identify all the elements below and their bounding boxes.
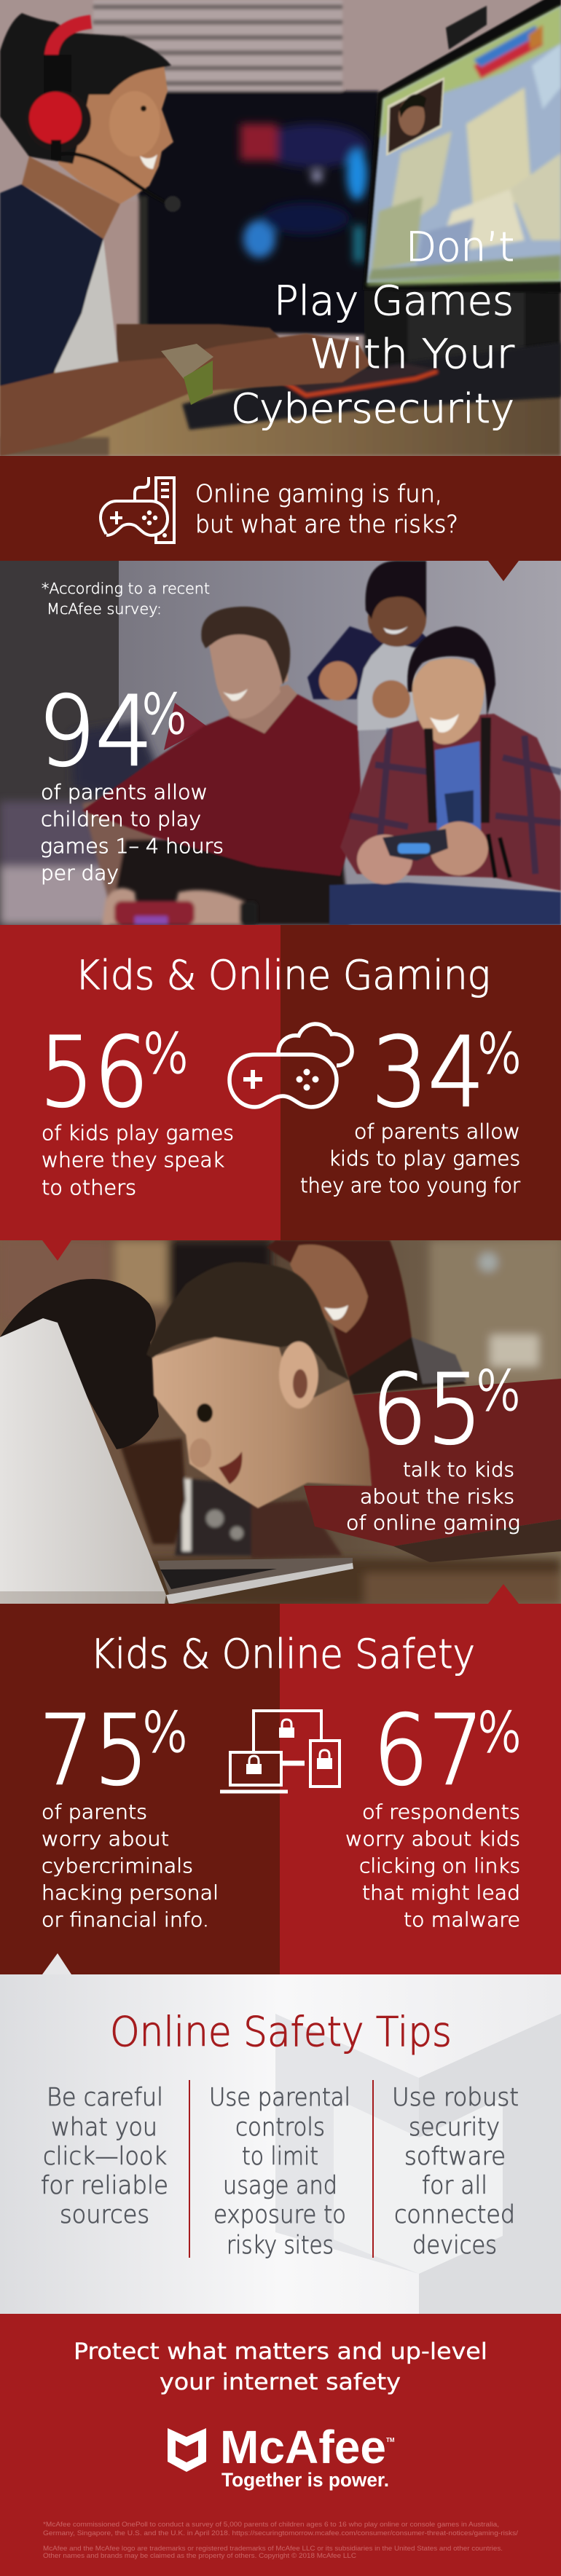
icon: game controller and tower <box>101 477 174 543</box>
stat: 94%: 94 <box>38 676 153 788</box>
fine print: Germany, Singapore, the U.S. and the U.K. in April 2018. https://securingtomorrow.mcafee.com/consumer/consumer-threat-notices/gaming-risks/ <box>43 2529 518 2537</box>
fine print <box>43 2521 518 2560</box>
teen boy in red sweater <box>82 607 361 925</box>
tip: security software: for all <box>422 2171 487 2200</box>
stat: 67%: that might lead <box>362 1882 520 1905</box>
tip: be careful: click—look <box>43 2142 167 2171</box>
survey note: *According to a recent <box>42 580 210 597</box>
stat: 34%: 34 <box>372 1017 484 1129</box>
monitor <box>363 0 561 293</box>
stat: 56%: to others <box>42 1175 136 1200</box>
logo: McAfee: Together is power. <box>221 2469 389 2491</box>
stat: 56% <box>39 1017 234 1200</box>
stat: 34%: kids to play games <box>329 1146 520 1170</box>
logo: McAfee: TM <box>386 2437 395 2443</box>
logo: McAfee: McAfee <box>220 2421 386 2473</box>
heading: Kids & Online Safety <box>90 1631 475 1677</box>
tip: security software: devices <box>412 2231 497 2260</box>
panel: hero photo of boy gaming <box>0 0 561 456</box>
tip: security software <box>392 2083 519 2260</box>
stat: 65% <box>346 1354 521 1535</box>
arrow: red pointer from safety panel <box>488 1584 519 1604</box>
laptop <box>0 1318 353 1604</box>
webcam inset <box>386 77 444 156</box>
stat: 34%: they are too young for <box>300 1173 520 1197</box>
stat: 67%: of respondents <box>362 1801 520 1824</box>
stat: 65%: talk to kids <box>403 1459 514 1481</box>
icon: controller with cloud <box>230 1024 352 1107</box>
title: Play Games <box>274 277 514 324</box>
panel: kids and online gaming <box>0 925 561 1240</box>
heading: Online Safety Tips <box>110 2009 452 2056</box>
stat: 75%: 75 <box>39 1695 149 1807</box>
arrow: white pointer <box>42 1953 71 1974</box>
icon: locked devices <box>220 1711 340 1792</box>
title <box>231 224 514 432</box>
other child's hair <box>0 1279 159 1449</box>
heading: Kids & Online Gaming <box>75 952 490 999</box>
call to action: your internet safety <box>160 2369 401 2395</box>
stat: 56%: of kids play games <box>42 1121 234 1145</box>
call to action <box>74 2339 487 2395</box>
smartwatch <box>161 344 213 405</box>
stat: 94%: % <box>141 682 187 747</box>
arrow: red pointer to photo <box>42 1240 71 1261</box>
stat: 65%: about the risks <box>360 1486 514 1508</box>
title: With Your <box>310 331 514 377</box>
tip: be careful: Be careful <box>47 2083 163 2112</box>
survey note <box>42 580 210 618</box>
tip: security software: security <box>409 2113 500 2142</box>
tip: be careful: what you <box>51 2113 157 2142</box>
stat: 56%: % <box>143 1021 189 1086</box>
tip: security software: software <box>404 2142 506 2171</box>
title: Don’t <box>406 224 514 270</box>
title: Cybersecurity <box>231 385 514 432</box>
stat: 65%: 65 <box>372 1354 482 1466</box>
banner text <box>195 479 458 538</box>
logo: McAfee <box>168 2421 395 2491</box>
panel: photo of child at laptop <box>0 1240 561 1604</box>
tip: parental controls <box>209 2083 350 2260</box>
tip: security software: Use robust <box>392 2083 519 2112</box>
stat: 94%: games 1– 4 hours <box>40 834 224 858</box>
tip: parental controls: controls <box>235 2113 325 2142</box>
stat: 67% <box>345 1695 522 1931</box>
stat: 56%: 56 <box>39 1017 149 1129</box>
mother <box>267 1240 466 1395</box>
stat: 67%: to malware <box>404 1909 520 1931</box>
stat: 94%: children to play <box>41 807 201 831</box>
stat: 67%: 67 <box>373 1695 484 1807</box>
tip: be careful <box>41 2083 168 2229</box>
stat: 65%: of online gaming <box>346 1512 520 1535</box>
fine print: McAfee and the McAfee logo are trademarks or registered trademarks of McAfee LLC or its subsidiaries in the United States and other countries. <box>43 2545 503 2553</box>
boy <box>0 13 372 456</box>
stat: 65%: % <box>476 1358 521 1423</box>
face <box>58 66 173 204</box>
banner text: Online gaming is fun, <box>195 479 442 508</box>
stat: 67%: % <box>477 1700 522 1765</box>
tip: be careful: sources <box>60 2200 149 2229</box>
stat: 75%: of parents <box>42 1801 147 1824</box>
arrow: banner pointer <box>488 561 519 581</box>
stat: 56%: where they speak <box>42 1148 224 1172</box>
stat: 75%: or financial info. <box>42 1909 209 1931</box>
stat: 34%: % <box>477 1021 522 1086</box>
panel: kids and online safety <box>0 1604 561 1974</box>
stat: 75% <box>39 1695 219 1931</box>
tip: parental controls: exposure to <box>213 2200 346 2229</box>
neck <box>22 157 120 239</box>
webcam device <box>446 6 487 50</box>
banner text: but what are the risks? <box>195 510 458 538</box>
tip: parental controls: to limit <box>242 2142 318 2171</box>
panel: photo of teens gaming on console <box>0 561 561 925</box>
stat: 34% <box>300 1017 522 1197</box>
keyboard <box>182 342 561 430</box>
floral top and hands <box>120 1438 342 1559</box>
tip: parental controls: Use parental <box>209 2083 350 2112</box>
boy behind <box>307 561 430 730</box>
stat: 94%: of parents allow <box>41 780 208 804</box>
stat: 94%: per day <box>41 861 119 885</box>
leg and trousers <box>82 792 350 925</box>
panel: online safety tips <box>0 1974 561 2314</box>
tip: be careful: for reliable <box>41 2171 168 2200</box>
tip: parental controls: usage and <box>223 2171 337 2200</box>
tip: security software: connected <box>394 2200 515 2229</box>
stat: 67%: worry about kids <box>345 1828 520 1851</box>
call to action: Protect what matters and up-level <box>74 2339 487 2365</box>
stat: 75%: hacking personal <box>42 1882 219 1905</box>
red shirt <box>304 1379 561 1546</box>
survey note: McAfee survey: <box>47 600 162 618</box>
stat: 94% <box>38 676 224 885</box>
stat: 34%: of parents allow <box>354 1119 520 1143</box>
tip: parental controls: risky sites <box>227 2231 334 2260</box>
fine print: Other names and brands may be claimed as the property of others. Copyright © 2018 McAfee LLC <box>43 2552 356 2560</box>
stat: 75%: cybercriminals <box>42 1855 193 1878</box>
fine print: *McAfee commissioned OnePoll to conduct a survey of 5,000 parents of children ages 6 to 16 who play online or console games in Australia, <box>43 2521 499 2529</box>
stat: 75%: % <box>142 1700 188 1765</box>
child's face <box>146 1262 372 1508</box>
stat: 67%: clicking on links <box>359 1855 520 1878</box>
panel: banner <box>0 456 561 561</box>
stat: 75%: worry about <box>42 1828 169 1851</box>
panel: footer <box>0 2314 561 2576</box>
girl in plaid <box>329 626 561 925</box>
